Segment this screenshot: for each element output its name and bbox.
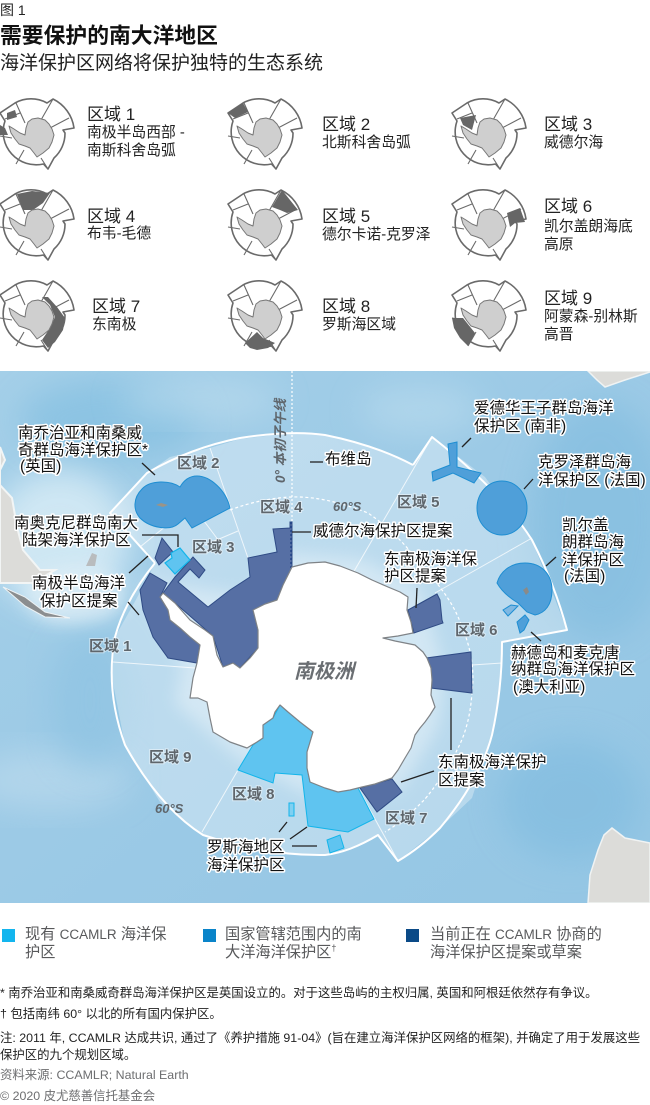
panel: region 1 key: 南斯科舍岛弧 (87, 143, 176, 159)
panel: region 6 key: 高原 (544, 237, 574, 253)
panel: region 3 key: 区域 3 (544, 115, 592, 134)
panel: region 6 key: 区域 6 (544, 197, 592, 216)
label: Prince Edward MPA: 保护区 (南非) (474, 417, 566, 435)
domain labels: 区域 2 (177, 455, 220, 472)
panel: region 2 key: 北斯科舍岛弧 (322, 135, 411, 151)
panel: region 2 key: 区域 2 (322, 115, 370, 134)
label: East Antarctica proposal lower: 区提案 (438, 771, 485, 789)
panel: region 4 key (0, 189, 151, 261)
leader lines (128, 438, 556, 846)
label: South Georgia MPA: (英国) (20, 457, 61, 475)
panel: region 7 key (0, 280, 140, 352)
note (0, 1031, 640, 1062)
legend: existing CCAMLR MPA: 护区 (25, 944, 55, 961)
domain boundaries (110, 371, 567, 861)
domain labels: 区域 3 (192, 539, 235, 556)
figure number: 图 1 (0, 2, 26, 18)
label: Heard and McDonald MPA: (澳大利亚) (513, 678, 585, 696)
footnote: asterisk: * 南乔治亚和南桑威奇群岛海洋保护区是英国设立的。对于这些岛屿的主权归属, 英国和阿根廷依然存有争议。 (0, 986, 598, 1000)
panel: region 6 key (451, 189, 633, 261)
legend: proposed MPAs (406, 926, 602, 961)
footnote: dagger: † 包括南纬 60° 以北的所有国内保护区。 (0, 1007, 222, 1021)
panel: region 3 key: 威德尔海 (544, 135, 603, 151)
label: South Orkney MPA: 南奥克尼群岛南大 (14, 514, 138, 532)
copyright: © 2020 皮尤慈善信托基金会 (0, 1089, 155, 1103)
note: 注: 2011 年, CCAMLR 达成共识, 通过了《养护措施 91-04》(旨在建立海洋保护区网络的框架), 并确定了用于发展这些 (0, 1031, 640, 1045)
panel: region 7 key: 区域 7 (92, 297, 140, 316)
prime meridian label: 0° 本初子午线 (273, 397, 288, 483)
panel: region 3 key (451, 98, 603, 170)
MPA: Heard Island and McDonald Islands (517, 615, 529, 633)
label: Antarctic Peninsula proposal: 保护区提案 (40, 592, 118, 610)
label: South Georgia MPA: 奇群岛海洋保护区* (18, 441, 148, 459)
panel: region 1 key: 区域 1 (87, 105, 135, 124)
panel: region 1 key (0, 98, 185, 170)
domain labels: 区域 4 (260, 499, 303, 516)
label: Kerguelen MPA: (法国) (564, 567, 605, 585)
label: Prince Edward MPA: 爱德华王子群岛海洋 (474, 399, 614, 417)
subtitle: 海洋保护区网络将保护独特的生态系统 (0, 53, 323, 74)
panel: region 2 key (227, 98, 411, 170)
source: 资料来源: CCAMLR; Natural Earth (0, 1068, 189, 1082)
shelf halo around the continent (160, 567, 432, 788)
domain labels: 区域 7 (385, 810, 428, 827)
domain labels: 区域 5 (397, 494, 440, 511)
label: Heard and McDonald MPA: 纳群岛海洋保护区 (511, 660, 635, 678)
legend: proposed MPAs: 海洋保护区提案或草案 (430, 944, 582, 961)
MPA: Ross Sea region (238, 705, 374, 853)
panel: region 6 key: 凯尔盖朗海底 (544, 219, 633, 235)
latitude labels: 60°S (333, 499, 362, 514)
proposed MPA: Weddell Sea and Antarctic Peninsula (140, 522, 292, 668)
legend: national MPAs: 国家管辖范围内的南 (225, 926, 362, 943)
panel: region 5 key (227, 189, 431, 261)
planning domain area tint (110, 433, 567, 861)
label: Crozet MPA: 洋保护区 (法国) (538, 471, 646, 489)
panel: region 4 key: 布韦-毛德 (87, 226, 151, 242)
domain labels: 区域 1 (89, 638, 132, 655)
domain labels: 区域 8 (232, 786, 275, 803)
panel: region 8 key: 罗斯海区域 (322, 317, 396, 333)
panel: region 9 key (451, 280, 638, 352)
MPA: Prince Edward Islands (432, 442, 481, 483)
latitude labels: 60°S (155, 801, 184, 816)
title: 需要保护的南大洋地区 (0, 23, 218, 48)
proposed MPA: East Antarctica (360, 594, 472, 812)
MPA: Kerguelen Islands (497, 563, 552, 616)
label: East Antarctica proposal upper: 东南极海洋保 (384, 550, 478, 568)
panel: region 7 key: 东南极 (92, 317, 136, 333)
label: Bouvet Island: 布维岛 (325, 450, 372, 468)
panel: region 5 key: 区域 5 (322, 207, 370, 226)
domain labels: 区域 6 (455, 622, 498, 639)
label: Kerguelen MPA: 洋保护区 (562, 551, 624, 569)
label: East Antarctica proposal upper: 护区提案 (384, 567, 447, 585)
legend: proposed MPAs: 当前正在 CCAMLR 协商的 (430, 926, 602, 943)
latitude labels (155, 499, 362, 816)
land: Australia (588, 828, 650, 903)
legend: national MPAs: 大洋海洋保护区† (225, 943, 336, 961)
MPA: South Georgia and South Sandwich Islands (135, 476, 230, 528)
label: Kerguelen MPA: 凯尔盖 (562, 516, 609, 534)
legend: national MPAs (203, 926, 362, 961)
Antarctica (160, 562, 435, 792)
label: Antarctic Peninsula proposal: 南极半岛海洋 (32, 574, 125, 592)
continent name: 南极洲 (294, 661, 357, 683)
panel: region 8 key: 区域 8 (322, 297, 370, 316)
panel: region 9 key: 阿蒙森-别林斯 (544, 309, 638, 325)
panel: region 5 key: 德尔卡诺-克罗泽 (322, 227, 431, 243)
label: Crozet MPA: 克罗泽群岛海 (538, 453, 631, 471)
label: East Antarctica proposal lower: 东南极海洋保护 (438, 753, 547, 771)
MPA: Crozet Islands (477, 481, 527, 535)
label: Ross Sea MPA: 罗斯海地区 (207, 838, 285, 856)
land: Africa (588, 371, 650, 387)
panel: region 8 key (227, 280, 396, 352)
panel: region 9 key: 高晋 (544, 327, 574, 343)
land: South America (0, 447, 97, 618)
legend: existing CCAMLR MPA (2, 926, 166, 961)
legend: existing CCAMLR MPA: 现有 CCAMLR 海洋保 (25, 926, 166, 943)
label: Kerguelen MPA: 朗群岛海 (562, 533, 624, 551)
label: Ross Sea MPA: 海洋保护区 (207, 856, 285, 874)
domain labels: 区域 9 (149, 749, 192, 766)
MPA: South Orkney Islands southern shelf (165, 548, 190, 574)
ocean background (0, 371, 650, 903)
panel: region 9 key: 区域 9 (544, 289, 592, 308)
panel: region 4 key: 区域 4 (87, 207, 135, 226)
label: Heard and McDonald MPA: 赫德岛和麦克唐 (511, 644, 620, 662)
label: South Orkney MPA: 陆架海洋保护区 (22, 531, 131, 549)
note: 保护区的九个规划区域。 (0, 1048, 136, 1062)
label: Weddell Sea proposal: 威德尔海保护区提案 (313, 522, 453, 540)
label: South Georgia MPA: 南乔治亚和南桑威 (18, 424, 142, 442)
panel: region 1 key: 南极半岛西部 - (87, 125, 185, 141)
domain labels (89, 455, 498, 827)
map of the Southern Ocean (0, 371, 650, 903)
